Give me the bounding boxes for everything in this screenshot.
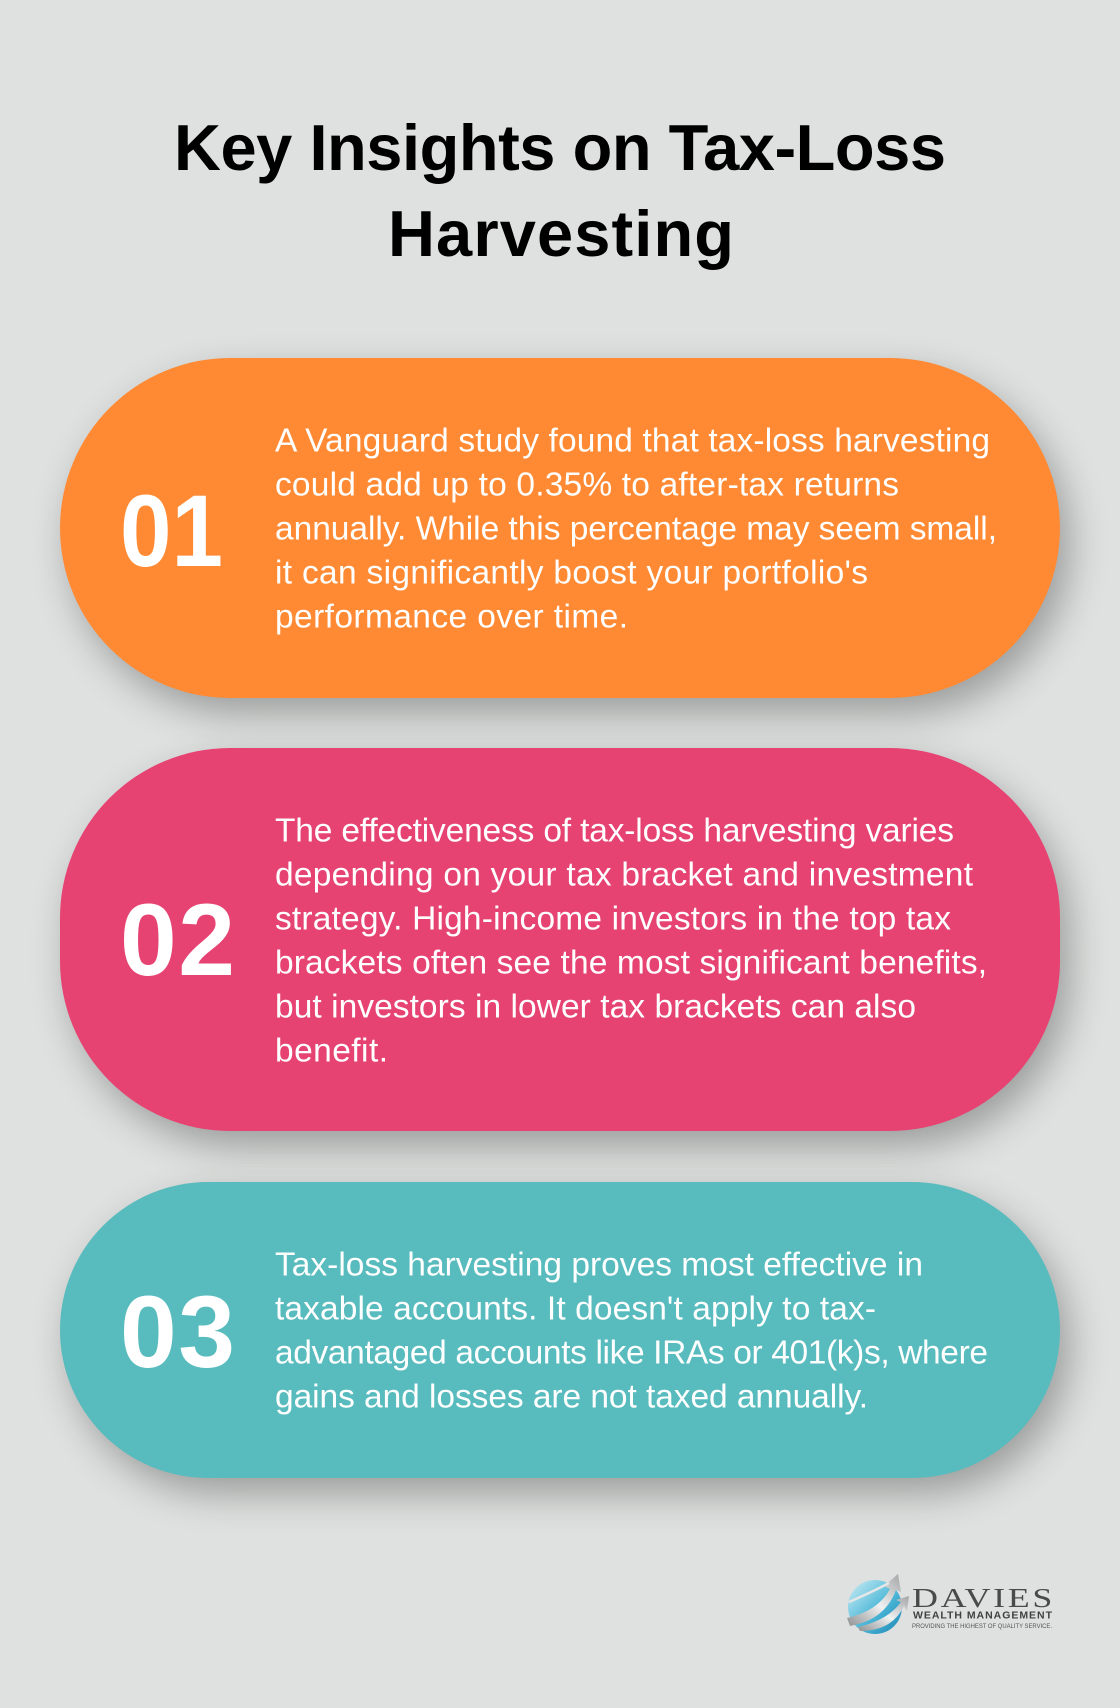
text: insight 02: The effectiveness of tax-loss harvesting varies: [275, 812, 954, 850]
text: insight 02: but investors in lower tax brackets can also: [275, 988, 916, 1026]
text: insight 03: advantaged accounts like IRAs or 401(k)s, where: [275, 1334, 988, 1372]
text: insight 02: brackets often see the most significant benefits,: [275, 944, 987, 982]
text: insight 02: [275, 812, 987, 1070]
text: insight 01: annually. While this percentage may seem small,: [275, 510, 997, 548]
text: insight 02: depending on your tax bracket and investment: [275, 856, 974, 894]
number 02: 02: [120, 883, 235, 997]
text: insight 03: taxable accounts. It doesn't apply to tax-: [275, 1290, 876, 1328]
text: insight 02: strategy. High-income investors in the top tax: [275, 900, 951, 938]
title: Harvesting: [388, 197, 734, 270]
logo subtitle: WEALTH MANAGEMENT: [913, 1610, 1053, 1622]
text: insight 03: [275, 1246, 988, 1416]
title: Key Insights on Tax-Loss: [174, 111, 946, 184]
text: insight 01: [275, 422, 997, 636]
panel: insight 01 background: [60, 358, 1060, 698]
panel: insight 03 background: [60, 1182, 1060, 1478]
title: [174, 111, 946, 270]
number 03: 03: [120, 1275, 235, 1389]
text: insight 01: could add up to 0.35% to after-tax returns: [275, 466, 899, 504]
text: insight 01: A Vanguard study found that tax-loss harvesting: [275, 422, 990, 460]
text: insight 02: benefit.: [275, 1032, 388, 1070]
logo wordmark: DAVIES: [912, 1583, 1055, 1613]
icon: globe with arrows: [847, 1574, 909, 1634]
text: insight 03: Tax-loss harvesting proves most effective in: [275, 1246, 923, 1284]
text: insight 01: it can significantly boost your portfolio's: [275, 554, 868, 592]
logo tagline: PROVIDING THE HIGHEST OF QUALITY SERVICE.: [912, 1623, 1052, 1630]
logo: Davies Wealth Management: [847, 1574, 1055, 1634]
panel: insight 02 background: [60, 748, 1060, 1131]
text: insight 01: performance over time.: [275, 598, 628, 636]
text: insight 03: gains and losses are not taxed annually.: [275, 1378, 868, 1416]
number 01: 01: [120, 474, 223, 588]
